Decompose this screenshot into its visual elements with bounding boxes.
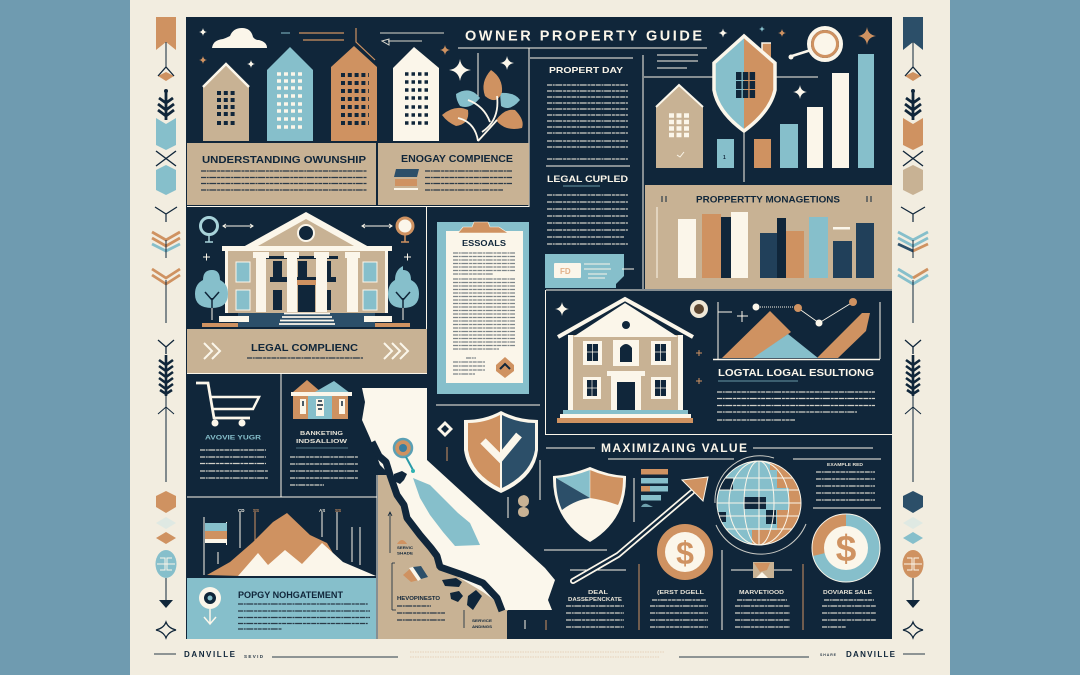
icon: check shield: [464, 411, 538, 493]
chevrons two: [152, 269, 180, 323]
tree right: [388, 266, 419, 320]
copper diamond: [156, 532, 176, 544]
column: marketing: [735, 590, 790, 627]
branch: [155, 207, 177, 222]
footer brand left: DANVILLE: [184, 650, 236, 659]
copper stars: [199, 45, 450, 64]
land: [362, 388, 555, 610]
panel: property day: [545, 65, 634, 288]
building: copper: [331, 46, 377, 141]
icon: diamond: [437, 421, 453, 437]
panel: legal solutions: [555, 298, 880, 423]
arrows: [203, 224, 411, 260]
flag: [205, 523, 227, 543]
arrow stem: [158, 396, 174, 482]
navy tip: [159, 600, 173, 608]
icon: dollar coin: $: [676, 535, 694, 571]
copper pluses: [696, 350, 702, 384]
copper mountain: [207, 513, 340, 576]
tick marks: [662, 196, 871, 202]
body text: [453, 253, 515, 374]
panel: california tan area: [378, 475, 520, 639]
icon: magnifier: [788, 28, 841, 60]
footer note left: SEVID: [244, 654, 264, 659]
coast rocks: [394, 471, 482, 610]
heading: ESSOALS: [462, 238, 506, 248]
divider: [436, 404, 540, 406]
icon: plant: [442, 53, 523, 141]
faint dotted rules: [410, 652, 665, 657]
panel borders: [187, 206, 529, 329]
divider: [546, 165, 630, 167]
heading: MAXIMIZAING VALUE: [601, 441, 747, 455]
panel frame: logical legal solutions: [546, 290, 892, 434]
stem and diamond: [905, 42, 921, 81]
small note one: SHADE: [397, 550, 413, 556]
panel: policy management: [187, 578, 376, 639]
body text: [200, 450, 268, 478]
panel: right of map: [436, 405, 540, 629]
column: dollars sale: DOVIARE SALE: [823, 590, 872, 596]
panel: engagement compliance: [378, 143, 529, 205]
axis: [656, 207, 658, 278]
branch two: [905, 340, 921, 354]
vertical markers: [204, 512, 360, 575]
bar chart: [717, 54, 874, 168]
heading: ENOGAY COMPIENCE: [401, 154, 513, 165]
column: first goal: (ERST DGELL: [657, 590, 705, 596]
stem and diamond: [158, 42, 174, 81]
panel: mountain: [204, 508, 376, 576]
small labels: SS: [335, 508, 341, 513]
column: marketing: MARVETIOOD: [739, 590, 784, 596]
panel: marketing houses: [290, 380, 358, 485]
copper roof lines: [299, 28, 375, 60]
body text: [201, 171, 367, 190]
body text: [238, 604, 370, 629]
branch two: [158, 340, 174, 354]
chevrons: [204, 343, 408, 359]
small labels: CD: [238, 508, 245, 513]
body text: [290, 457, 358, 485]
marks: [508, 497, 524, 518]
arrow: [573, 477, 708, 581]
ornament column: right: [898, 17, 928, 638]
star: [555, 302, 569, 316]
ornament column: left: [152, 17, 180, 638]
icon: teal badge: [200, 218, 218, 242]
pale diamond: [156, 517, 176, 529]
teal medallion: [156, 550, 176, 578]
feather: [158, 89, 174, 120]
heading: LEGAL COMPLIENC: [251, 342, 358, 354]
icon: central lake: [413, 478, 480, 546]
white mountain: [238, 543, 376, 576]
icon: copper badge: [397, 218, 413, 242]
icon: location pin: [394, 439, 415, 473]
tan shield: [903, 165, 923, 195]
body text: [717, 392, 875, 420]
rule: [296, 447, 348, 449]
tick: [524, 620, 526, 629]
copper stars: [778, 27, 876, 45]
stem and tip: [165, 578, 167, 603]
tree left: [195, 270, 228, 320]
icon: small house: [656, 85, 703, 168]
icon: house shield: [714, 36, 775, 131]
copper medallion: [902, 550, 924, 578]
cross: [156, 151, 176, 166]
heading: PROPPERTTY MONAGETIONS: [696, 194, 840, 206]
icon: dollar coin: [657, 524, 713, 580]
underline: [563, 185, 600, 187]
stars: [718, 26, 807, 99]
panel: cart: [187, 374, 427, 639]
heading: LEGAL CUPLED: [547, 174, 628, 185]
footer note right: SHARE: [820, 653, 837, 657]
panel: shield and growth bars: [656, 26, 876, 182]
icon: courthouse: [202, 212, 410, 327]
footer rules: [154, 654, 925, 657]
blue hexagon: [903, 491, 923, 513]
heading: AVOVIE YUGR: [205, 434, 261, 442]
text: top right note: EXAMPLE RED: [827, 462, 864, 467]
cross: [903, 151, 923, 166]
icon: house: [557, 299, 693, 423]
column: deal: DASSEPENCKATE: [568, 597, 622, 603]
icon: globe: [715, 456, 806, 554]
footer brand right: DANVILLE: [846, 650, 896, 659]
underline: [718, 380, 798, 382]
labels on tan area: [388, 512, 492, 629]
small labels: AS: [319, 508, 325, 513]
arrow stem: [905, 396, 921, 482]
building: teal: [267, 47, 313, 141]
small labels: [238, 508, 341, 513]
heading: LOGTAL LOGAL ESULTIONG: [718, 367, 874, 379]
panel: legal compliance: [187, 329, 427, 373]
bars: [678, 212, 874, 278]
heading: POPGY NOHGATEMENT: [238, 590, 343, 600]
icon: small figure: [518, 495, 529, 517]
side lines: [546, 564, 803, 630]
icon: clip: [458, 222, 508, 233]
teal shield two: [156, 165, 176, 195]
panel: maximizing value: [540, 441, 881, 630]
panel: courthouse: [187, 206, 529, 329]
feather: [905, 89, 921, 120]
footer: [154, 650, 925, 659]
bookmark: [903, 17, 923, 50]
body text: [547, 85, 628, 159]
chevrons one: [152, 232, 180, 258]
navy tip: [906, 600, 920, 608]
panel: essentials document: [437, 222, 529, 394]
column: dollars sale: [822, 590, 876, 627]
map: california: [362, 388, 555, 611]
icon: cloud: [212, 28, 267, 48]
small note one: [388, 512, 413, 610]
panel dividers: [643, 55, 818, 289]
bar label: 1: [723, 155, 726, 161]
heading: PROPERT DAY: [549, 65, 623, 75]
shield stem: [743, 132, 745, 182]
copper marker: [254, 512, 256, 542]
title rule: [458, 48, 707, 207]
icon: dollar donut: $: [836, 528, 857, 569]
star outline: [156, 622, 176, 638]
heading: title: OWNER PROPERTY GUIDE: [465, 28, 702, 44]
teal tag: [545, 254, 634, 288]
legend bars: [641, 469, 668, 507]
pale diamond: [903, 517, 923, 529]
column: deal: [566, 590, 624, 627]
small note three: [464, 610, 492, 629]
icon: emblem: [496, 357, 514, 378]
panel: property management chart: [645, 185, 892, 289]
long feather: [906, 355, 920, 396]
panel dividers: [187, 374, 427, 639]
coast strip: [372, 442, 502, 611]
icon: pin: [199, 587, 221, 624]
main dark board: [186, 17, 892, 639]
body text: [247, 357, 363, 359]
teal tag: FD: [560, 267, 571, 276]
column: deal: DEAL: [588, 590, 609, 596]
building: tan: [203, 63, 249, 141]
text: top right note: [816, 462, 875, 500]
icon: cart: [196, 383, 259, 426]
heading rules: [540, 448, 881, 630]
icon: map tile: [753, 562, 774, 578]
chevrons one: [898, 232, 928, 258]
icon: rolled map: [403, 566, 428, 582]
chart: [713, 298, 880, 360]
icon: badge: [690, 300, 708, 318]
teal shield one: [156, 118, 176, 150]
icon: houses: [291, 380, 352, 419]
stars: [199, 28, 514, 81]
panel: understanding ownership: [187, 143, 376, 205]
small note one: SERVIC: [397, 545, 413, 550]
body text: [425, 171, 512, 190]
copper shield: [903, 118, 923, 150]
arrow line: [380, 33, 444, 45]
small note three: ANDINGS: [472, 624, 492, 629]
building: cream: [393, 47, 439, 141]
heading: UNDERSTANDING OWUNSHIP: [202, 154, 366, 166]
icon: segmented shield: [553, 467, 626, 542]
side ticks: [633, 478, 635, 522]
column: first goal: [650, 590, 708, 627]
star outline: [903, 622, 923, 638]
teal diamond: [903, 532, 923, 544]
decorative top lines: [281, 32, 290, 34]
panel: buildings: [199, 28, 523, 141]
copper mark: [446, 447, 448, 461]
bookmark: [156, 17, 176, 50]
heading second line: INDSALLIOW: [296, 439, 348, 445]
body text: [547, 195, 628, 244]
branch: [901, 207, 925, 222]
small labels: SS: [253, 508, 259, 513]
chevrons two: [898, 269, 928, 323]
heading: BANKETING: [300, 431, 344, 437]
stem: [912, 578, 914, 603]
small note three: SERVICE: [472, 618, 492, 623]
icon: dollar donut: [812, 514, 880, 582]
long feather: [159, 355, 173, 396]
icon: books: [394, 169, 419, 190]
small note two: HEVOPINESTO: [397, 596, 440, 602]
copper hexagon: [156, 491, 176, 513]
